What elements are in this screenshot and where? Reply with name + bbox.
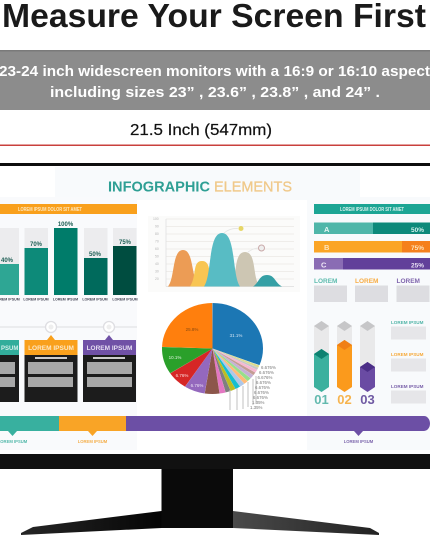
progress C: 25% — [411, 262, 424, 270]
progress header: LOREM IPSUM DOLOR SIT AMET — [340, 207, 404, 213]
pie outer labels: 6.676% — [261, 365, 276, 370]
column 03: 03 — [360, 392, 375, 407]
bar chart header: LOREM IPSUM DOLOR SIT AMET — [18, 207, 82, 213]
bar captions — [0, 298, 138, 302]
area chart — [148, 216, 300, 292]
area chart axis labels: 50 — [155, 254, 159, 258]
bar captions: LOREM IPSUM — [53, 298, 78, 302]
segmented timeline bar: LOREM IPSUM — [344, 439, 374, 444]
pie outer labels — [250, 365, 276, 410]
area peaks — [168, 233, 282, 286]
lorem columns: LOREM — [355, 278, 378, 285]
segmented timeline bar — [0, 416, 430, 444]
progress C: C — [321, 260, 327, 270]
progress A — [314, 222, 430, 234]
area chart axis labels: 90 — [155, 224, 159, 228]
pie labels: 6.76% — [176, 373, 188, 378]
panel: timeline cards — [0, 322, 137, 402]
pie labels: 10.1% — [169, 355, 181, 360]
panel: bar chart — [0, 204, 138, 302]
card: purple: LOREM IPSUM — [87, 345, 132, 352]
pie labels: 25.8% — [186, 327, 198, 332]
pie outer labels: 6.676% — [255, 385, 270, 390]
column 01: 01 — [314, 392, 329, 407]
area chart axis labels: 20 — [155, 277, 159, 281]
column captions — [391, 320, 426, 404]
pie outer labels: 1.35% — [250, 405, 263, 410]
card: teal: PSUM — [1, 346, 18, 352]
lorem columns: LOREM — [314, 278, 337, 285]
area chart axis labels: 80 — [155, 232, 159, 236]
bar values: 70% — [30, 242, 43, 248]
area chart axis labels: 70 — [155, 240, 159, 244]
lorem columns: LOREM — [396, 278, 420, 285]
progress A: A — [324, 225, 330, 234]
progress B: B — [324, 243, 330, 252]
progress C — [314, 258, 430, 270]
banner: compatible monitor sizes: 23-24 inch widescreen monitors with a 16:9 or 16:10 aspect — [0, 63, 430, 80]
pie outer labels: 6.676% — [254, 390, 269, 395]
heading: infographic elements — [108, 180, 292, 196]
column captions: LOREM IPSUM — [391, 384, 424, 389]
banner: compatible monitor sizes — [0, 50, 430, 110]
monitor stand — [21, 468, 379, 535]
pie outer labels: 6.676% — [259, 370, 274, 375]
heading: infographic elements: ELEMENTS — [214, 180, 292, 196]
bar chart header — [0, 204, 137, 214]
progress B: 75% — [411, 245, 424, 252]
card: orange: LOREM IPSUM — [28, 345, 74, 352]
pie outer labels: 6.676% — [253, 395, 268, 400]
segment pointers — [8, 431, 17, 436]
bar captions: LOREM IPSUM — [82, 298, 108, 302]
progress B — [314, 241, 430, 252]
timeline nodes — [46, 322, 114, 332]
area chart axis labels: 40 — [155, 262, 159, 266]
pie outer labels: 6.676% — [258, 375, 272, 380]
panel: progress bars — [314, 204, 430, 302]
heading: infographic elements: INFOGRAPHIC — [108, 180, 210, 196]
bar values: 100% — [58, 222, 74, 228]
progress A: 50% — [411, 227, 424, 234]
bar captions: LOREM IPSUM — [112, 298, 138, 302]
pie slices — [177, 316, 248, 381]
bar values — [1, 222, 132, 264]
column captions: LOREM IPSUM — [391, 352, 424, 357]
pie chart — [169, 316, 276, 410]
bars — [0, 228, 136, 295]
lorem columns — [314, 278, 430, 302]
area chart axis labels: 30 — [155, 270, 159, 274]
pie outer labels: 6.676% — [256, 380, 271, 385]
pie labels: 31.1% — [230, 333, 242, 338]
banner: compatible monitor sizes: including sizes 23” , 23.6” , 23.8” , and 24” . — [50, 84, 380, 101]
area chart axis labels: 60 — [155, 247, 159, 251]
area chart axis labels — [153, 217, 159, 281]
pie leader lines — [230, 376, 256, 410]
segmented timeline bar: LOREM IPSUM — [78, 439, 108, 444]
pie labels: 6.76% — [191, 383, 203, 388]
monitor — [0, 163, 430, 535]
pie outer labels: 1.35% — [252, 400, 265, 405]
column captions: LOREM IPSUM — [391, 320, 424, 325]
bar values: 50% — [89, 252, 102, 258]
area chart markers — [224, 226, 264, 252]
bar values: 40% — [1, 258, 14, 264]
screen — [0, 166, 430, 454]
pie labels — [169, 327, 242, 388]
3D column chart — [314, 320, 426, 407]
bar values: 75% — [119, 240, 132, 246]
bar captions: LOREM IPSUM — [23, 298, 49, 302]
monitor top edge — [0, 163, 430, 166]
monitor bezel — [0, 454, 430, 469]
area chart axis labels: 100 — [153, 217, 159, 221]
column 02: 02 — [337, 392, 352, 407]
screen width measurement: 21.5 Inch (547mm) — [130, 122, 272, 139]
